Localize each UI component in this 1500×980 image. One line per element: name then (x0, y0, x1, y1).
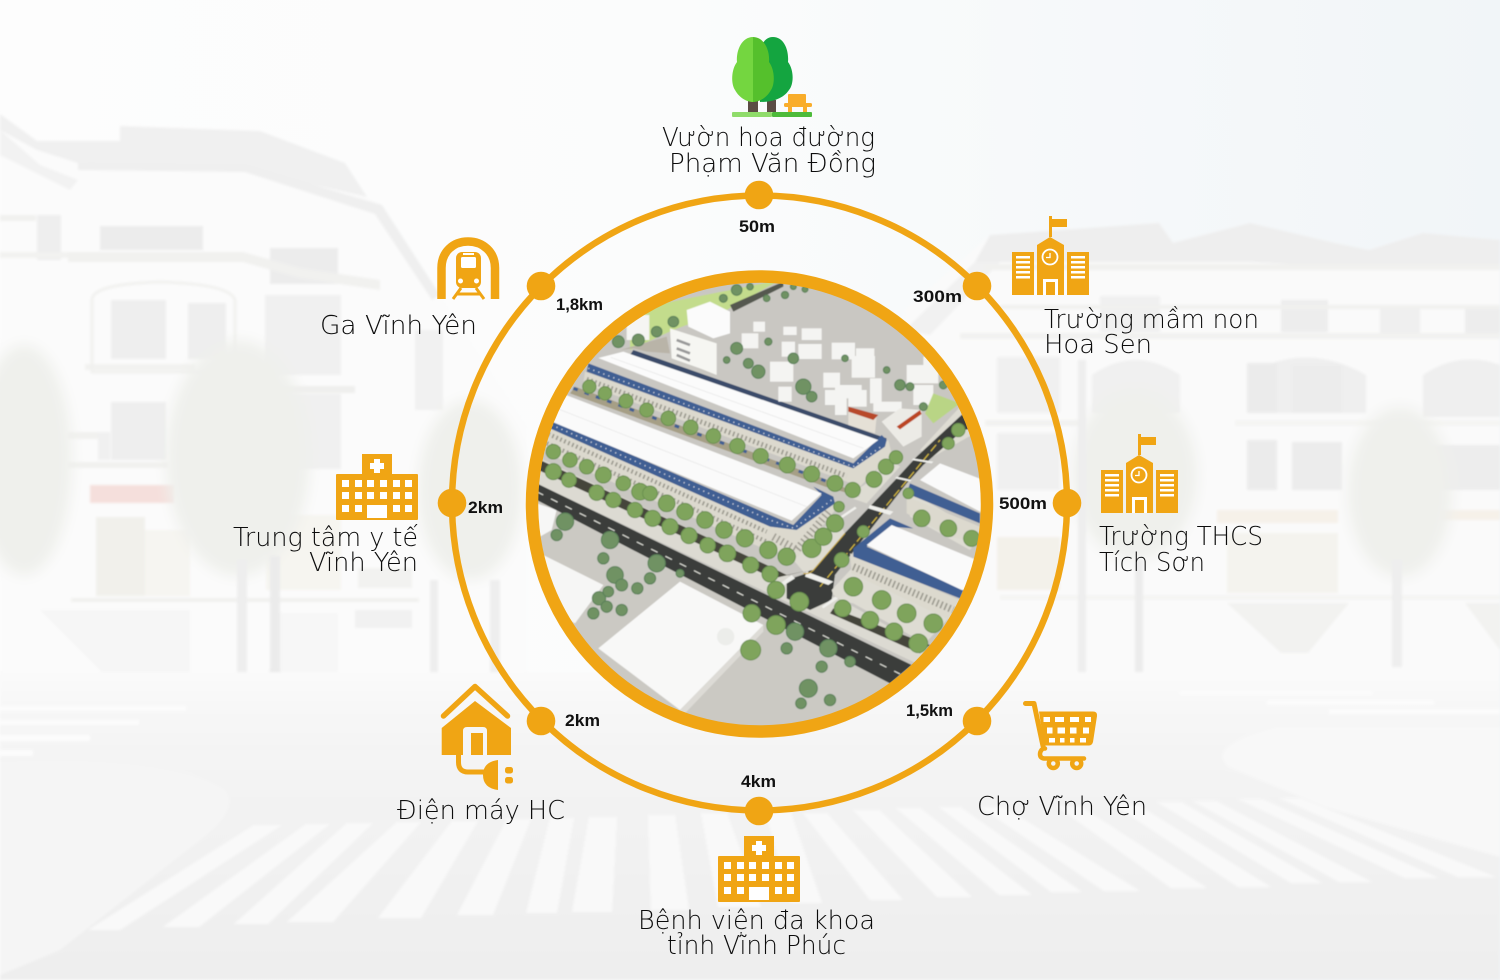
icon: provincial hospital (718, 836, 800, 902)
icon: trees and bench (732, 37, 812, 117)
label: Bệnh viện đa khoa tỉnh Vĩnh Phúc: tỉnh Vĩnh Phúc (667, 931, 846, 961)
label: Chợ Vĩnh Yên: Chợ Vĩnh Yên (977, 792, 1147, 822)
label: Trường THCS Tích Sơn: Tích Sơn (1099, 548, 1205, 578)
label: Trường mầm non Hoa Sen (1044, 305, 1259, 360)
distance: 1,8km: 1,8km (556, 296, 603, 314)
label: Bệnh viện đa khoa tỉnh Vĩnh Phúc: Bệnh viện đa khoa (638, 906, 875, 936)
label: Trường mầm non Hoa Sen: Trường mầm non (1044, 305, 1259, 335)
label: Trung tâm y tế Vĩnh Yên (233, 523, 418, 578)
outer distance ring (452, 196, 1067, 810)
distance: 2km lower: 2km (565, 712, 600, 730)
distance: 500m: 500m (999, 495, 1047, 513)
distance: 2km left: 2km (468, 499, 503, 517)
label: Vườn hoa đường Phạm Văn Đồng (662, 123, 876, 179)
icon: kindergarten school (1012, 216, 1089, 295)
label: Vườn hoa đường Phạm Văn Đồng: Phạm Văn Đồng (669, 149, 876, 179)
label: Bệnh viện đa khoa tỉnh Vĩnh Phúc (638, 906, 875, 961)
distance: 50m: 50m (739, 218, 775, 236)
icon: house with electric plug (442, 686, 513, 790)
label: Trường THCS Tích Sơn (1099, 522, 1263, 578)
label: Điện máy HC: Điện máy HC (397, 796, 565, 826)
label: Vườn hoa đường Phạm Văn Đồng: Vườn hoa đường (662, 123, 875, 153)
distance: 1,5km: 1,5km (906, 702, 953, 720)
icon: secondary school (1101, 434, 1178, 513)
label: Trung tâm y tế Vĩnh Yên: Vĩnh Yên (309, 548, 418, 578)
central aerial view of the project (520, 270, 1000, 740)
label: Trường mầm non Hoa Sen: Hoa Sen (1044, 330, 1152, 360)
icon: shopping cart (1026, 704, 1097, 768)
label: Ga Vĩnh Yên: Ga Vĩnh Yên (320, 311, 477, 341)
label: Trung tâm y tế Vĩnh Yên: Trung tâm y tế (233, 523, 418, 553)
label: Trường THCS Tích Sơn: Trường THCS (1099, 522, 1263, 552)
distance: 4km: 4km (741, 773, 776, 791)
distance: 300m: 300m (913, 288, 962, 306)
icon: medical centre (336, 454, 418, 520)
icon: train in tunnel (442, 242, 495, 299)
ring marker dots (438, 181, 1081, 825)
